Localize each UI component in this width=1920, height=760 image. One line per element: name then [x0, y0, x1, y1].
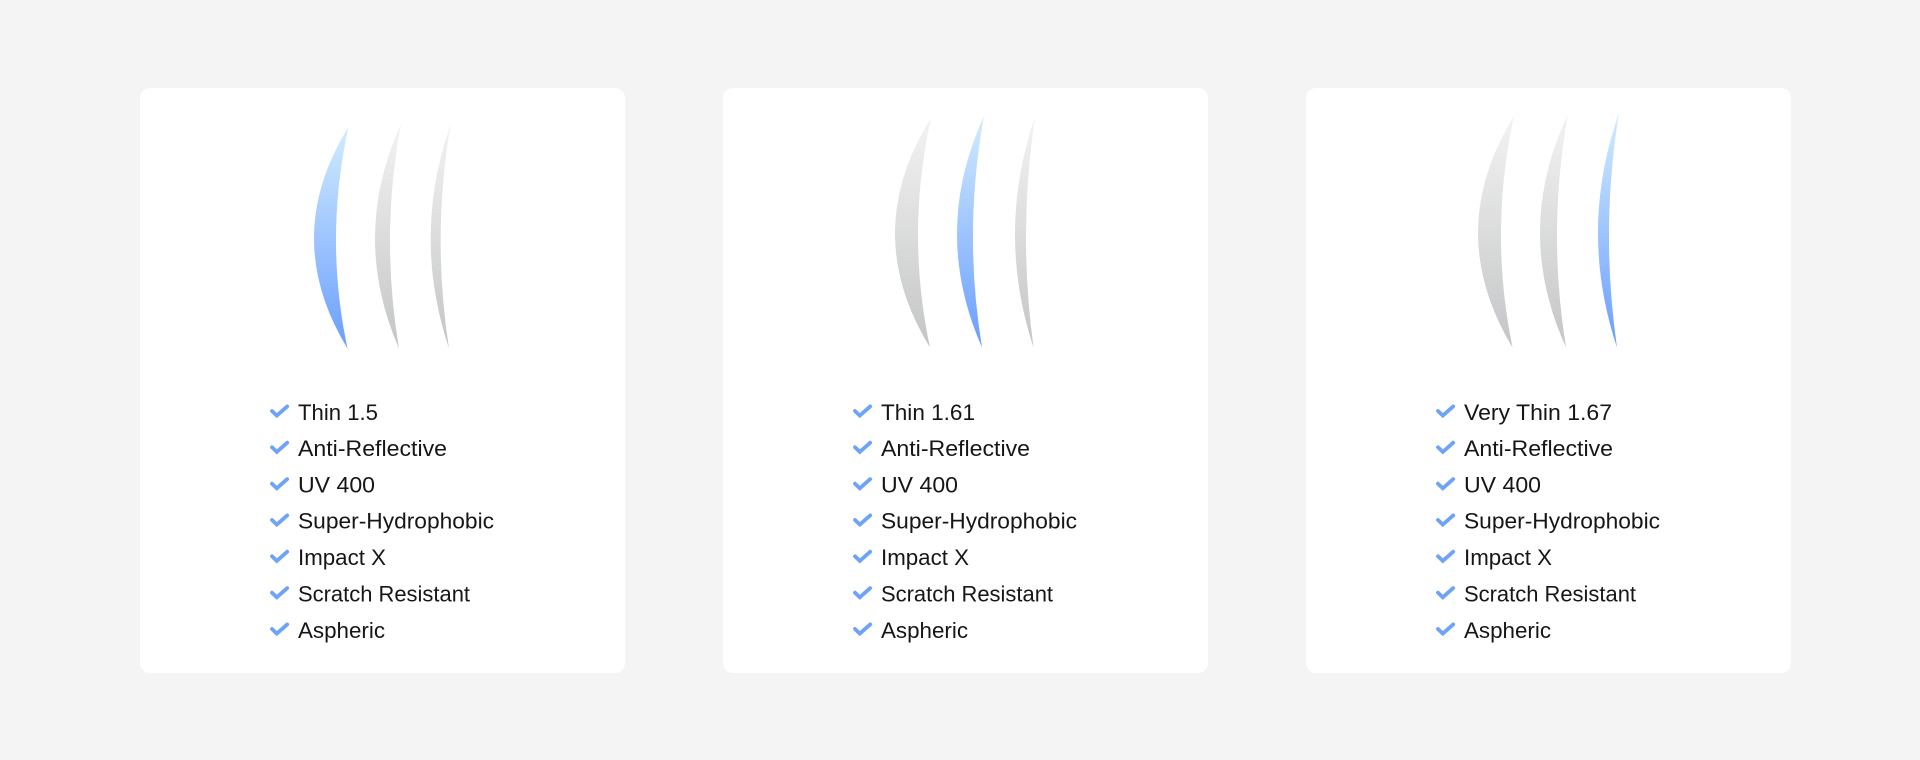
feature: Thin 1.61: Thin 1.61: [881, 400, 975, 425]
feature: Anti-Reflective: Anti-Reflective: [881, 436, 1030, 461]
panel: Thin 1.5 lens: [140, 88, 625, 673]
feature: Scratch Resistant: Scratch Resistant: [881, 582, 1053, 606]
feature: Super-Hydrophobic: Super-Hydrophobic: [1464, 509, 1660, 534]
panel: Very Thin 1.67 lens: [1306, 88, 1791, 673]
icon: lens diagram, 1.5 highlighted: [314, 124, 451, 348]
feature: UV 400: UV 400: [298, 472, 375, 498]
feature: Scratch Resistant: Scratch Resistant: [298, 582, 470, 606]
feature: Impact X: Impact X: [298, 545, 386, 570]
feature: Aspheric: Aspheric: [1464, 618, 1551, 643]
feature list: [1438, 400, 1660, 643]
icon: lens diagram, 1.61 highlighted: [895, 116, 1035, 348]
feature: UV 400: UV 400: [1464, 472, 1541, 498]
feature: Aspheric: Aspheric: [298, 618, 385, 643]
feature: Anti-Reflective: Anti-Reflective: [1464, 436, 1613, 461]
feature: Impact X: Impact X: [881, 545, 969, 570]
feature: UV 400: UV 400: [881, 472, 958, 498]
feature: Very Thin 1.67: Very Thin 1.67: [1464, 400, 1612, 425]
feature: Scratch Resistant: Scratch Resistant: [1464, 582, 1636, 606]
icon: lens diagram, 1.67 highlighted: [1478, 113, 1619, 348]
feature: Super-Hydrophobic: Super-Hydrophobic: [881, 509, 1077, 534]
feature: Anti-Reflective: Anti-Reflective: [298, 436, 447, 461]
panel: Thin 1.61 lens: [723, 88, 1208, 673]
feature: Thin 1.5: Thin 1.5: [298, 400, 378, 425]
feature list: [855, 400, 1077, 643]
feature: Aspheric: Aspheric: [881, 618, 968, 643]
feature: Super-Hydrophobic: Super-Hydrophobic: [298, 509, 494, 534]
feature: Impact X: Impact X: [1464, 545, 1552, 570]
feature list: [272, 400, 494, 643]
